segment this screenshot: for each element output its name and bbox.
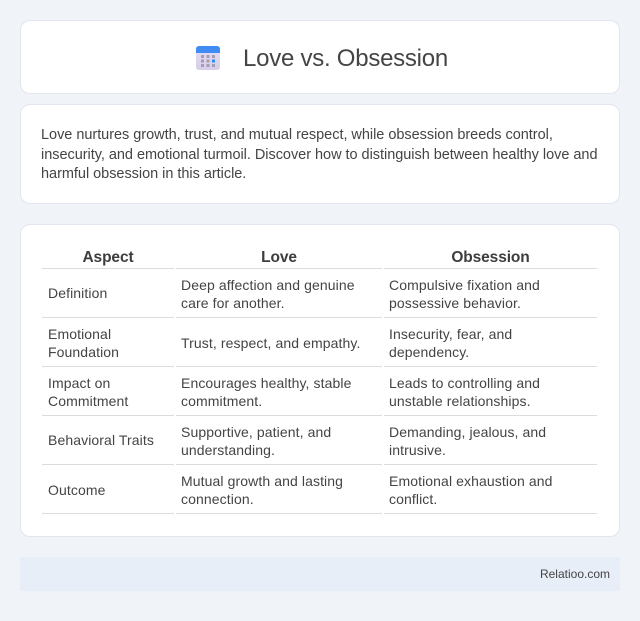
row: behavioral traits: Supportive, patient, and (181, 424, 331, 440)
row: impact on commitment (48, 375, 540, 409)
column headers: Obsession (451, 249, 530, 266)
intro text: Love nurtures growth, trust, and mutual respect, while obsession breeds control, (41, 127, 553, 143)
panel: comparison table card (20, 224, 620, 537)
row: behavioral traits: understanding. (181, 442, 275, 458)
row: outcome: Mutual growth and lasting (181, 473, 343, 489)
row: behavioral traits: Behavioral Traits (48, 432, 154, 448)
row: emotional foundation: dependency. (389, 344, 469, 360)
footer bar (20, 557, 620, 591)
row: definition: possessive behavior. (389, 295, 521, 311)
row: impact on commitment: unstable relationships. (389, 393, 531, 409)
intro text: harmful obsession in this article. (41, 166, 246, 182)
row: behavioral traits (48, 424, 546, 458)
row: outcome: Outcome (48, 482, 106, 498)
row: definition: care for another. (181, 295, 285, 311)
row: impact on commitment: Encourages healthy, stable (181, 375, 351, 391)
row: definition (48, 277, 540, 311)
row: outcome: Emotional exhaustion and (389, 473, 553, 489)
row: impact on commitment: Impact on (48, 375, 110, 391)
row: impact on commitment: Leads to controlling and (389, 375, 540, 391)
row: definition: Deep affection and genuine (181, 277, 355, 293)
row: emotional foundation (48, 326, 512, 360)
panel: intro card (20, 104, 620, 204)
column headers: Love (261, 249, 297, 266)
footer brand: Relatioo.com (540, 567, 610, 581)
column headers (82, 249, 530, 266)
row: emotional foundation: Insecurity, fear, and (389, 326, 512, 342)
intro text (41, 127, 597, 182)
row: definition: Definition (48, 285, 107, 301)
row: behavioral traits: Demanding, jealous, and (389, 424, 546, 440)
row: outcome (48, 473, 553, 507)
row: outcome: connection. (181, 491, 254, 507)
row: outcome: conflict. (389, 491, 437, 507)
row: definition: Compulsive fixation and (389, 277, 540, 293)
comparison table (42, 249, 597, 514)
column headers: Aspect (82, 249, 134, 266)
title: Love vs. Obsession (243, 45, 448, 72)
row: impact on commitment: Commitment (48, 393, 128, 409)
row: emotional foundation: Foundation (48, 344, 119, 360)
row: impact on commitment: commitment. (181, 393, 262, 409)
row: behavioral traits: intrusive. (389, 442, 446, 458)
icon: calendar (196, 46, 220, 70)
row: emotional foundation: Trust, respect, and empathy. (181, 335, 360, 351)
panel: title card (20, 20, 620, 94)
intro text: insecurity, and emotional turmoil. Discover how to distinguish between healthy love and (41, 147, 597, 163)
row: emotional foundation: Emotional (48, 326, 111, 342)
